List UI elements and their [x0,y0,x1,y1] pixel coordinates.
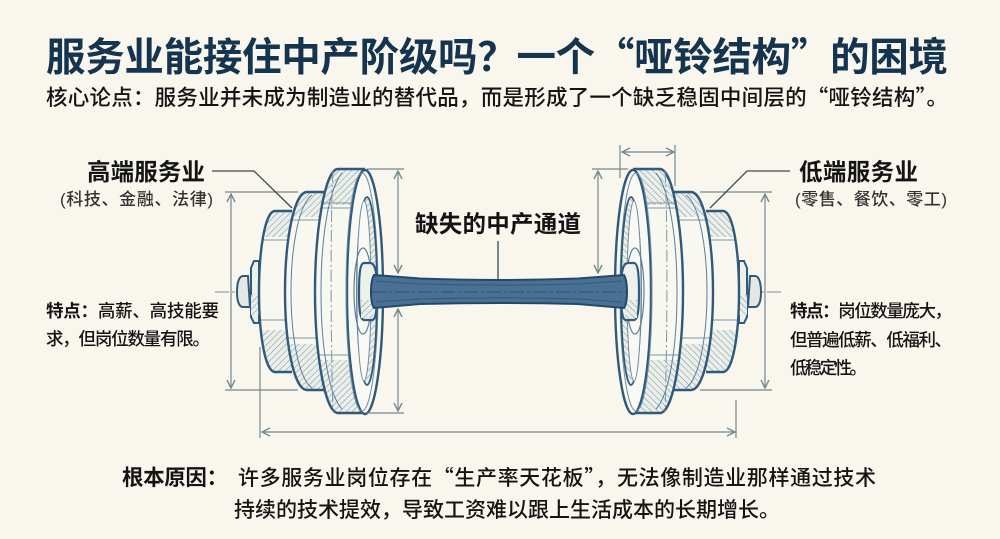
text block: root cause: 许多服务业岗位存在“生产率天花板”，无法像制造业那样通过技术 [238,462,876,492]
title: 服务业能接住中产阶级吗？一个“哑铃结构”的困境 [46,26,948,83]
text block: low-end traits: 特点：岗位数量庞大， [790,301,952,321]
text block: high-end traits [46,301,219,349]
subtitle: core argument: 核心论点：服务业并未成为制造业的替代品，而是形成了一个缺乏稳固中间层的“哑铃结构”。 [46,81,948,112]
leader line: missing channel [497,241,499,281]
right weight plates [615,169,761,415]
label: low-end services: (零售、餐饮、零工) [795,190,947,209]
label: missing middle channel: 缺失的中产通道 [415,211,581,237]
text block: high-end traits: 特点：高薪、高技能要 [46,301,219,321]
label: low-end services: 低端服务业 [799,159,918,185]
label: high-end services: 高端服务业 [87,159,205,185]
label: high-end services [60,159,213,209]
thin middle bar [371,275,627,308]
left weight plates [237,169,383,415]
text block: low-end traits: 低稳定性。 [790,358,867,378]
text block: low-end traits [790,301,952,378]
text block: root cause [122,461,876,524]
text block: root cause: 根本原因： [122,461,228,492]
centre axis line [215,291,781,293]
label: low-end services [795,159,947,209]
text block: root cause: 持续的技术提效，导致工资难以跟上生活成本的长期增长。 [234,494,780,524]
dumbbell diagram [215,145,781,438]
leader line: low-end [710,171,790,208]
label: high-end services: (科技、金融、法律) [60,189,213,209]
text block: high-end traits: 求，但岗位数量有限。 [46,329,210,349]
leader line: high-end [212,171,292,208]
text block: low-end traits: 但普遍低薪、低福利、 [790,330,952,350]
dimension lines [225,145,772,438]
